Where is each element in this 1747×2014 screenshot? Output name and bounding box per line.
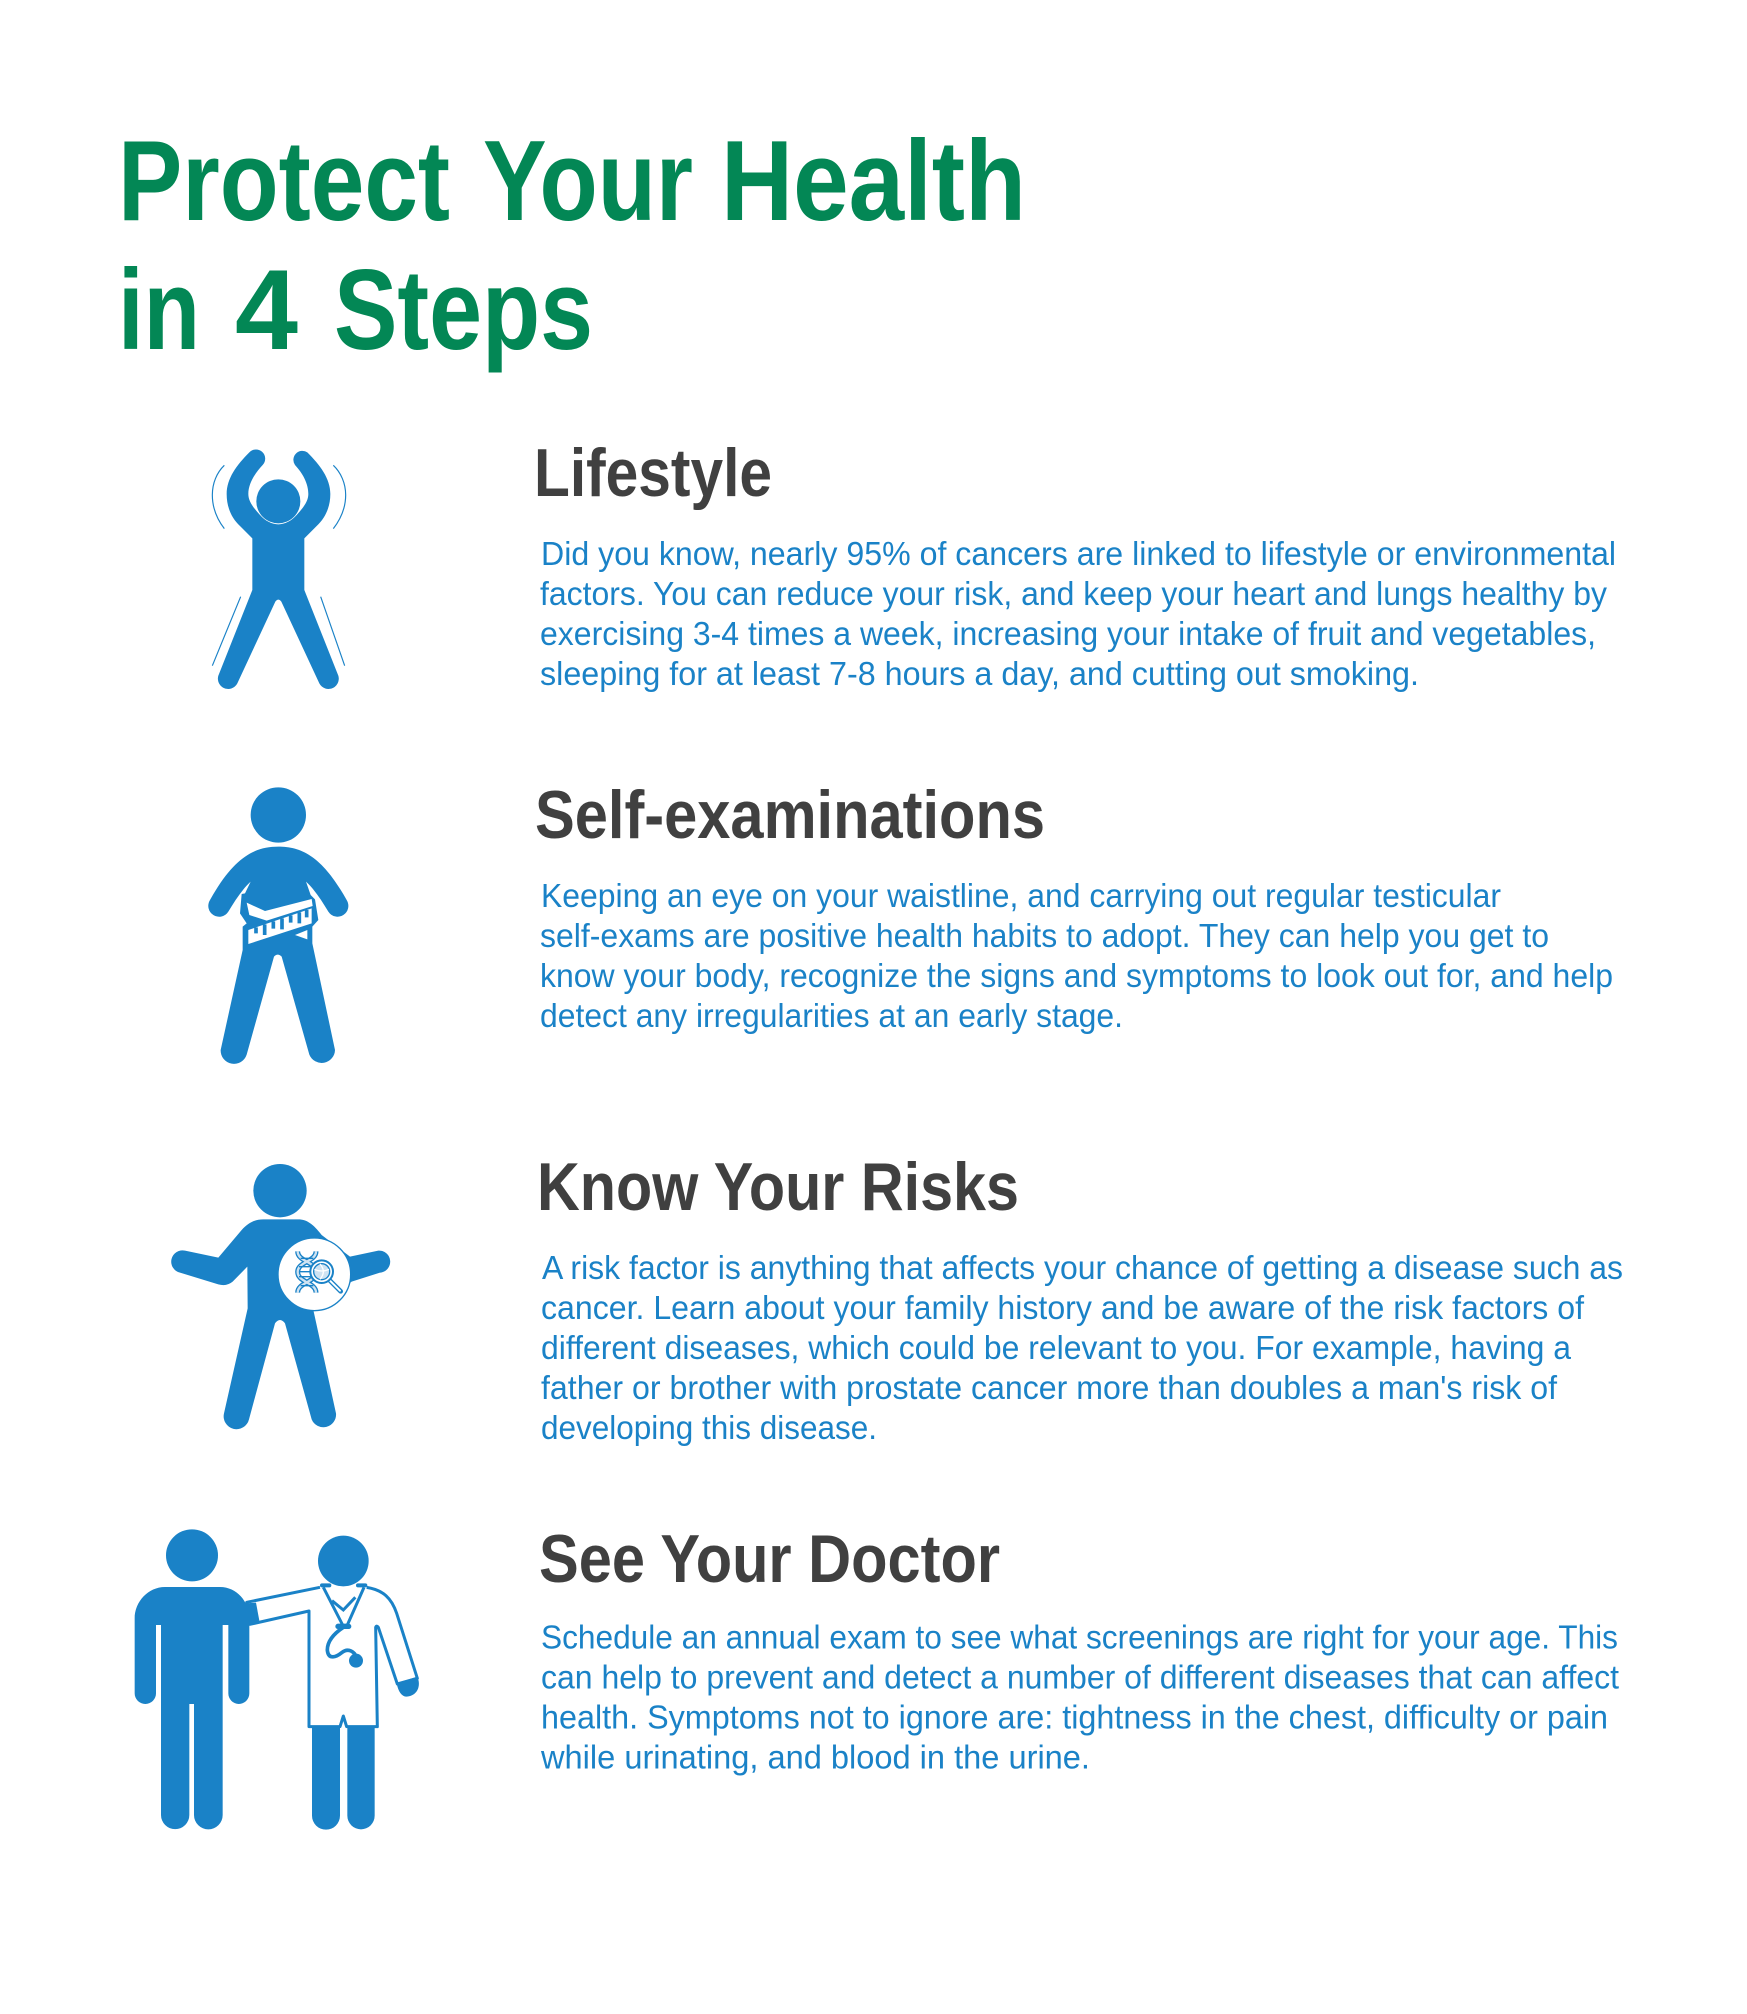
title: Health	[721, 118, 1026, 245]
heading: lifestyle: Lifestyle	[534, 435, 772, 511]
text: know your risks body: cancer. Learn about your family history and be aware of the risk factors of	[541, 1289, 1585, 1326]
heading: know your risks: Know Your Risks	[537, 1149, 1019, 1225]
text: self-examinations body: Keeping an eye on your waistline, and carrying out regular testicular	[541, 877, 1501, 914]
text: know your risks body	[541, 1249, 1623, 1446]
icon: jumping figure	[212, 449, 346, 689]
panel: see your doctor	[135, 1521, 1619, 1830]
text: lifestyle body: exercising 3-4 times a week, increasing your intake of fruit and vegetables,	[540, 615, 1596, 652]
text: lifestyle body: sleeping for at least 7-8 hours a day, and cutting out smoking.	[540, 655, 1419, 692]
icon: figure with DNA magnifier	[171, 1164, 390, 1429]
text: see your doctor body	[540, 1618, 1619, 1776]
title: Steps	[334, 247, 593, 374]
text: know your risks body: A risk factor is anything that affects your chance of getting a disease such as	[542, 1249, 1623, 1286]
text: see your doctor body: Schedule an annual exam to see what screenings are right for your age. This	[541, 1618, 1618, 1656]
text: lifestyle body	[540, 535, 1616, 692]
text: see your doctor body: health. Symptoms not to ignore are: tightness in the chest, difficulty or pain	[541, 1698, 1608, 1736]
text: lifestyle body: factors. You can reduce your risk, and keep your heart and lungs healthy by	[540, 575, 1607, 612]
text: self-examinations body: detect any irregularities at an early stage.	[540, 997, 1123, 1034]
magnifier badge	[278, 1238, 351, 1311]
panel: lifestyle	[212, 435, 1616, 692]
text: see your doctor body: while urinating, and blood in the urine.	[540, 1738, 1090, 1776]
title: Protect	[118, 118, 450, 245]
text: self-examinations body	[540, 877, 1613, 1034]
title: Your	[483, 118, 693, 245]
title: 4	[235, 247, 298, 374]
text: self-examinations body: know your body, recognize the signs and symptoms to look out for, and help	[540, 957, 1613, 994]
heading: self-examinations: Self-examinations	[535, 777, 1045, 853]
text: know your risks body: developing this disease.	[541, 1409, 877, 1446]
title: in	[118, 247, 200, 374]
icon: figure with measuring tape	[208, 787, 348, 1064]
text: lifestyle body: Did you know, nearly 95% of cancers are linked to lifestyle or environmental	[541, 535, 1616, 572]
text: see your doctor body: can help to prevent and detect a number of different diseases that can affect	[541, 1658, 1619, 1696]
icon: patient and doctor	[135, 1529, 419, 1830]
text: self-examinations body: self-exams are positive health habits to adopt. They can help you get to	[540, 917, 1549, 954]
text: know your risks body: different diseases, which could be relevant to you. For example, having a	[541, 1329, 1572, 1366]
text: know your risks body: father or brother with prostate cancer more than doubles a man's risk of	[541, 1369, 1558, 1406]
patient figure	[135, 1529, 259, 1829]
title	[118, 118, 1026, 374]
panel: know your risks	[171, 1149, 1623, 1446]
doctor figure	[247, 1536, 419, 1830]
heading: see your doctor: See Your Doctor	[539, 1521, 1000, 1597]
panel: self-examinations	[208, 777, 1613, 1064]
